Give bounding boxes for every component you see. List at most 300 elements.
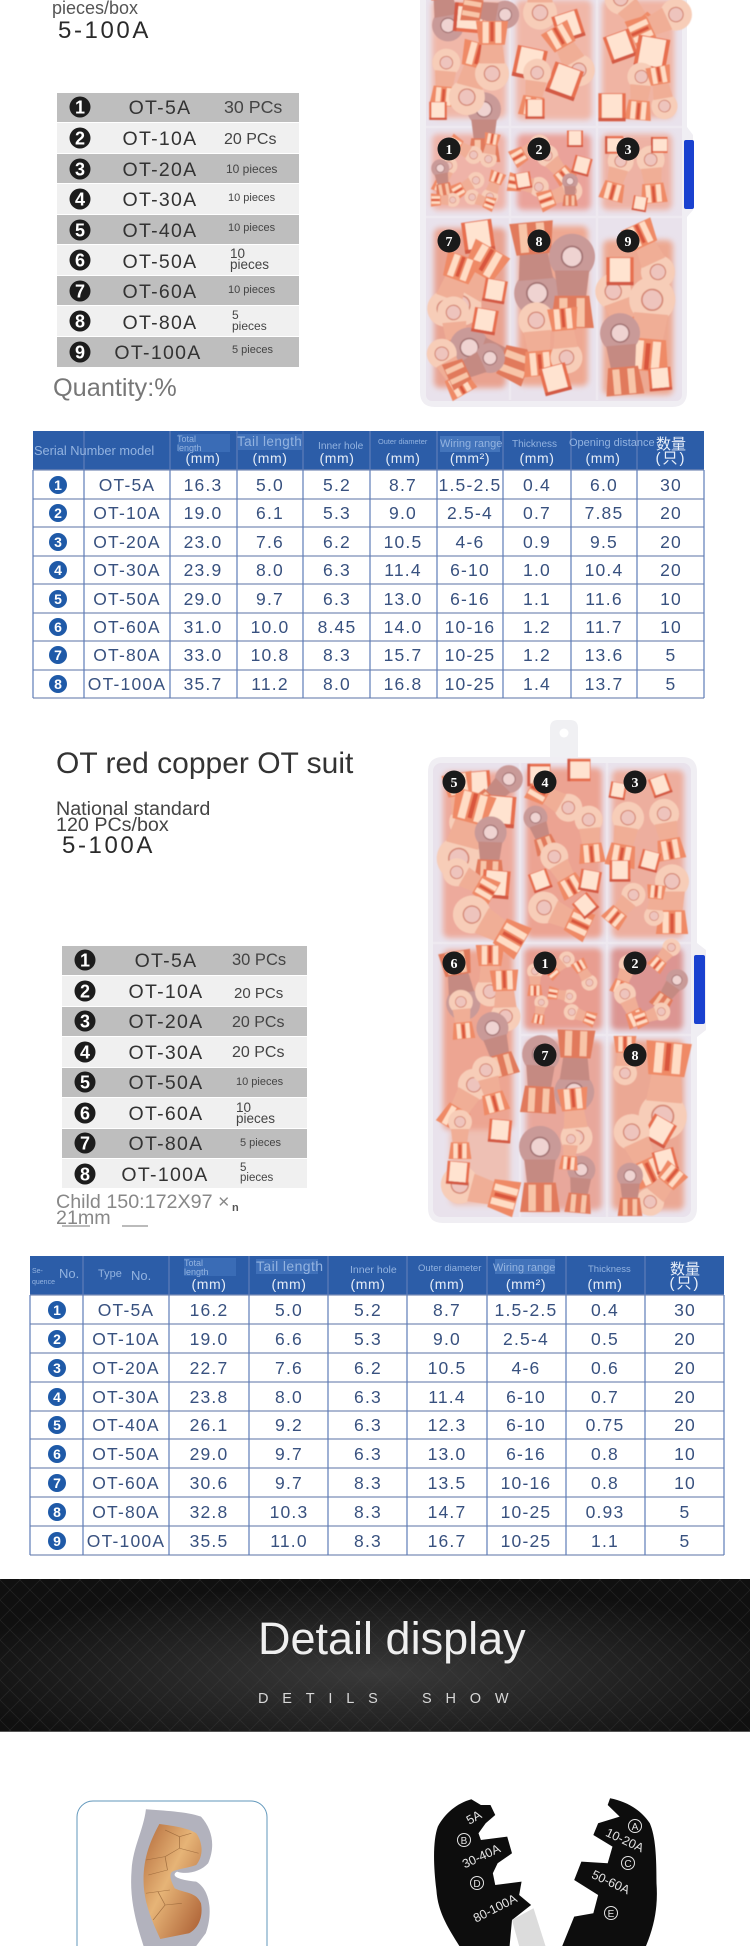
right jaw size marks: C [624, 1859, 632, 1870]
spec table 2 [30, 1256, 724, 1555]
table 2 values: 11.4 [428, 1387, 466, 1407]
legend list: first kit quantities: 9 [75, 342, 85, 362]
table 2 values: 13.5 [428, 1473, 466, 1493]
table 1 values: OT-10A [93, 503, 161, 523]
legend list: second kit quantities: OT-5A [135, 950, 197, 972]
table 1 values: 5 [666, 674, 676, 694]
table 2 values: 10-25 [501, 1502, 551, 1522]
legend list: second kit quantities: 3 [80, 1012, 90, 1032]
table 2 values: 13.0 [428, 1444, 466, 1464]
table 2 values: 8.0 [275, 1387, 303, 1407]
table 1 values: 6.0 [590, 475, 618, 495]
table 2 header labels: Outer diameter [418, 1263, 481, 1274]
table 1 header labels: Wiring range [440, 438, 502, 450]
table 1 values: 9.7 [256, 589, 284, 609]
banner subtitle: DETILS [258, 1691, 392, 1707]
table 2 values: 0.4 [591, 1300, 619, 1320]
table 1 header labels: Total [177, 434, 196, 444]
legend list: second kit quantities: 5 pieces [240, 1137, 281, 1149]
table 1 values: 10-25 [445, 674, 495, 694]
legend list: first kit quantities: pieces [232, 319, 267, 333]
table 2 values: 10.5 [428, 1358, 466, 1378]
detail panel: crimping pliers jaws [434, 1798, 657, 1946]
legend list: first kit quantities: pieces [230, 257, 269, 272]
table 1 header labels: (mm) [519, 450, 555, 466]
table 1 row badges: 4 [54, 562, 62, 578]
table 1 values: 5.2 [323, 475, 351, 495]
legend list: first kit quantities: 5 [232, 308, 239, 322]
table 1 values: 10 [660, 589, 682, 609]
legend list: first kit quantities: 4 [75, 190, 85, 210]
number badges on second box: 5 [450, 776, 458, 791]
box size note: Child 150:172X97 × [56, 1191, 230, 1213]
table 1 values: 10.0 [251, 617, 289, 637]
legend list: first kit quantities: 1 [75, 98, 85, 118]
title: OT red copper OT suit [56, 747, 354, 780]
table 2 header labels: (mm) [587, 1276, 623, 1292]
table 1 row badges: 3 [54, 534, 62, 550]
legend list: first kit quantities: OT-30A [122, 189, 198, 211]
table 2 values: 10-25 [501, 1531, 551, 1551]
table 1 values: 10.5 [384, 532, 422, 552]
table 1 values: 30 [660, 475, 682, 495]
table 1 values: 35.7 [184, 674, 222, 694]
table 1 values: 10.4 [585, 560, 623, 580]
table 1 values: 8.45 [318, 617, 356, 637]
table 1 values: 2.5-4 [447, 503, 493, 523]
subtitle: pieces per box: 120 PCs/box [56, 814, 169, 836]
table 2 values: 9.2 [275, 1415, 303, 1435]
table 1 values: 7.6 [256, 532, 284, 552]
table 1 values: 1.5-2.5 [439, 475, 501, 495]
table 2 row badges: 2 [53, 1331, 61, 1347]
table 1 values: 13.6 [585, 645, 623, 665]
subtitle: national standard: National standard [56, 798, 210, 820]
legend list: first kit quantities: 3 [75, 160, 85, 180]
table 2 header labels: length [184, 1267, 209, 1277]
table 2 values: 6.3 [354, 1387, 382, 1407]
table 1 values: 23.0 [184, 532, 222, 552]
legend list: second kit quantities: 8 [80, 1164, 90, 1184]
table 1 header labels: Opening distance [569, 437, 655, 449]
table 2 values: 6-10 [506, 1415, 546, 1435]
banner subtitle [258, 1691, 522, 1707]
section 1: top legend text and list [52, 0, 299, 402]
table 1 values: 1.0 [523, 560, 551, 580]
legend list: second kit quantities: OT-80A [128, 1133, 204, 1155]
table 2 values: 0.7 [591, 1387, 619, 1407]
table 2 header labels: (mm) [350, 1276, 386, 1292]
legend list: first kit quantities [57, 93, 299, 367]
table 2 values: 1.5-2.5 [495, 1300, 557, 1320]
left jaw size marks [458, 1807, 520, 1925]
legend list: second kit quantities: 10 [236, 1100, 251, 1115]
table 1 header labels: 数量 [656, 436, 686, 453]
right jaw size marks [589, 1820, 647, 1920]
table 2 values: 20 [674, 1387, 696, 1407]
left jaw size marks: 80-100A [471, 1891, 520, 1925]
number badges on second box: 8 [632, 1049, 638, 1064]
table 1 values: 1.2 [523, 617, 551, 637]
legend list: second kit quantities: OT-20A [128, 1011, 204, 1033]
legend list: first kit quantities: 8 [75, 312, 85, 332]
table 2 values: 6.3 [354, 1444, 382, 1464]
box size note [56, 1191, 239, 1229]
table 2 values: 23.8 [190, 1387, 228, 1407]
legend list: first kit quantities: 6 [75, 250, 85, 270]
table 1 values: 13.7 [585, 674, 623, 694]
table 1 values: 0.4 [523, 475, 551, 495]
table 1 values: 8.3 [323, 645, 351, 665]
table 1 header labels: (mm) [385, 450, 421, 466]
legend list: second kit quantities: OT-30A [128, 1042, 204, 1064]
table 1 header labels: Serial Number model [34, 443, 154, 458]
table 2 values: OT-10A [92, 1329, 160, 1349]
product photo: second terminal box [428, 720, 706, 1223]
table 1 row badges: 7 [54, 647, 62, 663]
table 2 values: 0.8 [591, 1473, 619, 1493]
table 2 values: OT-50A [92, 1444, 160, 1464]
table 1 values: 6.1 [256, 503, 284, 523]
banner subtitle: SHOW [422, 1691, 522, 1707]
table 2 header labels: (mm) [271, 1276, 307, 1292]
table 2 header labels: quence [32, 1279, 55, 1286]
table 2 values: 0.93 [586, 1502, 624, 1522]
table 2 values: 8.7 [433, 1300, 461, 1320]
number badges on second box: 1 [542, 957, 548, 972]
number badges on second box: 3 [632, 776, 638, 791]
row 3 [461, 219, 495, 254]
table 2 values: 35.5 [190, 1531, 228, 1551]
right jaw size marks: 50-60A [589, 1868, 633, 1898]
table 2 values: 5 [680, 1502, 690, 1522]
table 2 values: 5.2 [354, 1300, 382, 1320]
right jaw size marks: E [608, 1909, 615, 1920]
table 1 header labels: (mm) [585, 450, 621, 466]
right jaw size marks: 10-20A [603, 1826, 647, 1856]
legend list: second kit quantities: 7 [80, 1134, 90, 1154]
table 1 values: 31.0 [184, 617, 222, 637]
table 2 values: 10 [674, 1444, 696, 1464]
left jaw size marks: D [473, 1879, 481, 1890]
table 2 values: 8.3 [354, 1473, 382, 1493]
table 1 values: 0.7 [523, 503, 551, 523]
table 2 row badges: 6 [53, 1446, 61, 1462]
table 2 values: 0.5 [591, 1329, 619, 1349]
legend list: first kit quantities: 10 pieces [226, 162, 277, 176]
left jaw size marks: B [461, 1836, 468, 1847]
legend list: first kit quantities: 5 pieces [232, 344, 273, 356]
number badges on second box: 7 [542, 1049, 548, 1064]
table 2 values [87, 1300, 696, 1551]
number badges on second box: 2 [632, 957, 638, 972]
table 1 values: 1.2 [523, 645, 551, 665]
table 2 values: 30 [674, 1300, 696, 1320]
table 1 values: 7.85 [585, 503, 623, 523]
number badges on first box [438, 138, 640, 252]
table 2 header labels: No. [131, 1268, 151, 1283]
table 1 header labels: (只) [656, 450, 686, 467]
table 1 values: 11.7 [585, 617, 623, 637]
table 1 values: 9.0 [389, 503, 417, 523]
table 2 values: 16.7 [428, 1531, 466, 1551]
spec table 1 [33, 431, 704, 698]
right jaw size marks: A [632, 1822, 639, 1833]
table 1 values: OT-20A [93, 532, 161, 552]
legend list: first kit quantities: 7 [75, 282, 85, 302]
table 1 values: 5.0 [256, 475, 284, 495]
table 1 values: 33.0 [184, 645, 222, 665]
table 2 values: 1.1 [591, 1531, 619, 1551]
table 1 values: 10 [660, 617, 682, 637]
table 1 values: 10-16 [445, 617, 495, 637]
table 1 values: OT-5A [99, 475, 155, 495]
table 2 values: OT-5A [98, 1300, 154, 1320]
number badges on first box: 9 [624, 235, 632, 250]
table 1 row badges: 8 [54, 676, 62, 692]
table 1 header labels: Outer diameter [378, 437, 428, 446]
table 1 values: OT-50A [93, 589, 161, 609]
table 1 header labels: Inner hole [318, 441, 364, 452]
table 1 values: OT-80A [93, 645, 161, 665]
table 2 row badges: 9 [53, 1533, 61, 1549]
legend list: first kit quantities: 2 [75, 128, 85, 148]
table 2 values: 19.0 [190, 1329, 228, 1349]
table 2 header labels: Total [184, 1258, 203, 1268]
table 2 values: 6-16 [506, 1444, 546, 1464]
legend list: second kit quantities: 10 pieces [236, 1076, 284, 1088]
box size note: 21mm [56, 1207, 111, 1229]
legend list: second kit quantities: 1 [80, 950, 90, 970]
table 1 values: 8.0 [323, 674, 351, 694]
table 1 row badges [49, 476, 67, 693]
legend list: first kit quantities: 10 pieces [228, 222, 276, 234]
table 2 row badges: 4 [53, 1389, 61, 1405]
table 2 values: 20 [674, 1329, 696, 1349]
table 2 values: OT-30A [92, 1387, 160, 1407]
table 1 values: 13.0 [384, 589, 422, 609]
table 1 values: 11.4 [384, 560, 422, 580]
legend list: second kit quantities [62, 946, 307, 1188]
number badges on second box: 6 [450, 957, 458, 972]
table 2 header labels: (只) [670, 1275, 700, 1292]
table 2 values: 5.3 [354, 1329, 382, 1349]
table 1 values: 0.9 [523, 532, 551, 552]
legend list: first kit quantities: 10 pieces [228, 192, 276, 204]
legend list: first kit quantities: OT-50A [122, 251, 198, 273]
label: ampere range: 5-100A [58, 17, 151, 44]
table 1 values: 19.0 [184, 503, 222, 523]
legend list: second kit quantities: OT-50A [128, 1072, 204, 1094]
table 1 values: 29.0 [184, 589, 222, 609]
table 2 header labels: Inner hole [350, 1264, 397, 1276]
table 1 values: 14.0 [384, 617, 422, 637]
table 1 header labels: Tail length [237, 434, 302, 449]
banner: detail display [0, 1579, 750, 1732]
table 2 values: OT-20A [92, 1358, 160, 1378]
table 2 row badges: 5 [53, 1417, 61, 1433]
table 1 values: 6.3 [323, 560, 351, 580]
table 2 values: 5.0 [275, 1300, 303, 1320]
legend list: first kit quantities: OT-5A [129, 97, 191, 119]
table 2 values: 7.6 [275, 1358, 303, 1378]
table 2 values: 29.0 [190, 1444, 228, 1464]
table 1 row badges: 5 [54, 591, 62, 607]
table 1 values: 23.9 [184, 560, 222, 580]
table 1 values: 20 [660, 560, 682, 580]
table 2 row badges: 1 [53, 1302, 61, 1318]
table 2 values: 6.6 [275, 1329, 303, 1349]
legend list: second kit quantities: 5 [80, 1072, 90, 1092]
table 2 values: 9.7 [275, 1473, 303, 1493]
table 1 values: 10.8 [251, 645, 289, 665]
legend list: second kit quantities: OT-10A [128, 981, 204, 1003]
legend list: first kit quantities: 5 [75, 220, 85, 240]
number badges on first box: 7 [446, 235, 452, 250]
legend list: second kit quantities: 6 [80, 1104, 90, 1124]
table 2 header labels: No. [59, 1266, 79, 1281]
table 2 values: 4-6 [512, 1358, 540, 1378]
table 1 values: 20 [660, 532, 682, 552]
table 1 values: 5.3 [323, 503, 351, 523]
number badges on first box: 8 [536, 235, 542, 250]
number badges on second box [442, 770, 646, 1066]
legend list: second kit quantities: 2 [80, 982, 90, 1002]
table 1 values: 9.5 [590, 532, 618, 552]
table 1 header labels [34, 434, 686, 467]
table 2 values: OT-40A [92, 1415, 160, 1435]
legend list: second kit quantities: 30 PCs [232, 951, 286, 969]
table 2 values: 8.3 [354, 1502, 382, 1522]
table 1 values: 6.3 [323, 589, 351, 609]
legend list: second kit quantities: 20 PCs [232, 1044, 284, 1061]
table 2 values: 30.6 [190, 1473, 228, 1493]
label: quantity: Quantity:% [53, 374, 177, 402]
legend list: first kit quantities: OT-40A [122, 220, 198, 242]
table 2 values: 20 [674, 1358, 696, 1378]
legend list: second kit quantities: OT-100A [121, 1164, 209, 1186]
table 2 values: 14.7 [428, 1502, 466, 1522]
table 1 values: 10-25 [445, 645, 495, 665]
legend list: second kit quantities: 5 [240, 1162, 246, 1174]
table 2 values: 11.0 [270, 1531, 308, 1551]
table 2 values: 5 [680, 1531, 690, 1551]
table 2 values: 0.75 [586, 1415, 624, 1435]
legend list: first kit quantities: 10 [230, 246, 245, 261]
table 2 values: OT-60A [92, 1473, 160, 1493]
label: ampere range: 5-100A [62, 832, 155, 859]
table 2 header labels [32, 1258, 700, 1292]
table 2 header labels: Thickness [588, 1264, 631, 1275]
legend list: first kit quantities: OT-20A [122, 159, 198, 181]
legend list: first kit quantities: 30 PCs [224, 97, 282, 117]
table 1 values: OT-100A [88, 674, 166, 694]
table 1 values: 15.7 [384, 645, 422, 665]
table 1 row badges: 1 [54, 477, 62, 493]
table 2 header labels: Se- [32, 1268, 44, 1275]
legend list: second kit quantities: 20 PCs [232, 1014, 284, 1031]
table 2 values: 6-10 [506, 1387, 546, 1407]
legend list: first kit quantities: OT-100A [114, 342, 202, 364]
table 2 values: 6.3 [354, 1415, 382, 1435]
table 2 row badges: 8 [53, 1504, 61, 1520]
table 2 header labels: (mm²) [506, 1276, 546, 1292]
table 2 row badges [48, 1301, 66, 1550]
legend list: second kit quantities: pieces [240, 1172, 273, 1184]
legend list: first kit quantities: OT-80A [122, 312, 198, 334]
table 2 values: 10-16 [501, 1473, 551, 1493]
number badges on first box: 3 [624, 143, 632, 158]
legend list: first kit quantities: OT-10A [122, 128, 198, 150]
table 2 header labels: Tail length [256, 1258, 323, 1274]
table 2 values: 20 [674, 1415, 696, 1435]
table 1 header labels: length [177, 443, 202, 453]
legend list: first kit quantities: 20 PCs [224, 131, 276, 148]
table 2 header labels: Type [98, 1268, 122, 1280]
detail panel: crimp cross-section [77, 1801, 267, 1946]
table 2 values: 0.8 [591, 1444, 619, 1464]
table 1 row badges: 6 [54, 619, 62, 635]
legend list: second kit quantities: OT-60A [128, 1103, 204, 1125]
section 2: kit heading and legend [56, 747, 354, 1229]
table 2 values: 32.8 [190, 1502, 228, 1522]
legend list: second kit quantities: 4 [80, 1042, 90, 1062]
table 1 values: 11.6 [585, 589, 623, 609]
table 2 values: 8.3 [354, 1531, 382, 1551]
left jaw size marks: 5A [464, 1807, 485, 1827]
table 1 values: 6-16 [450, 589, 490, 609]
number badges on first box: 2 [536, 143, 542, 158]
product photo: first terminal box [420, 0, 697, 407]
table 1 values: 16.3 [184, 475, 222, 495]
table 1 values: 8.0 [256, 560, 284, 580]
banner title: Detail display [258, 1613, 526, 1664]
table 1 values: 5 [666, 645, 676, 665]
legend list: first kit quantities: OT-60A [122, 281, 198, 303]
table 2 values: 2.5-4 [503, 1329, 549, 1349]
legend list: second kit quantities: pieces [236, 1111, 275, 1126]
box size note: n [232, 1202, 239, 1214]
table 1 values: 6-10 [450, 560, 490, 580]
table 2 values: OT-100A [87, 1531, 165, 1551]
table 2 values: 9.0 [433, 1329, 461, 1349]
row 2 [430, 154, 460, 195]
table 1 header labels: (mm) [185, 450, 221, 466]
table 2 values: 6.2 [354, 1358, 382, 1378]
table 2 row badges: 3 [53, 1360, 61, 1376]
table 2 row badges: 7 [53, 1475, 61, 1491]
table 1 values: 1.1 [523, 589, 551, 609]
number badges on second box: 4 [542, 776, 548, 791]
table 2 values: 26.1 [190, 1415, 228, 1435]
table 1 values: 8.7 [389, 475, 417, 495]
table 1 values: 16.8 [384, 674, 422, 694]
table 1 values [88, 475, 682, 694]
table 2 values: 0.6 [591, 1358, 619, 1378]
table 2 values: 16.2 [190, 1300, 228, 1320]
table 1 values: 1.4 [523, 674, 551, 694]
table 2 header labels: Wiring range [493, 1262, 555, 1274]
table 1 header labels: (mm) [319, 450, 355, 466]
table 1 row badges: 2 [54, 505, 62, 521]
table 1 values: 11.2 [251, 674, 289, 694]
table 2 values: OT-80A [92, 1502, 160, 1522]
table 1 header labels: (mm) [252, 450, 288, 466]
table 1 values: 6.2 [323, 532, 351, 552]
table 2 values: 12.3 [428, 1415, 466, 1435]
table 1 header labels: (mm²) [450, 450, 490, 466]
table 2 header labels: 数量 [670, 1261, 700, 1278]
